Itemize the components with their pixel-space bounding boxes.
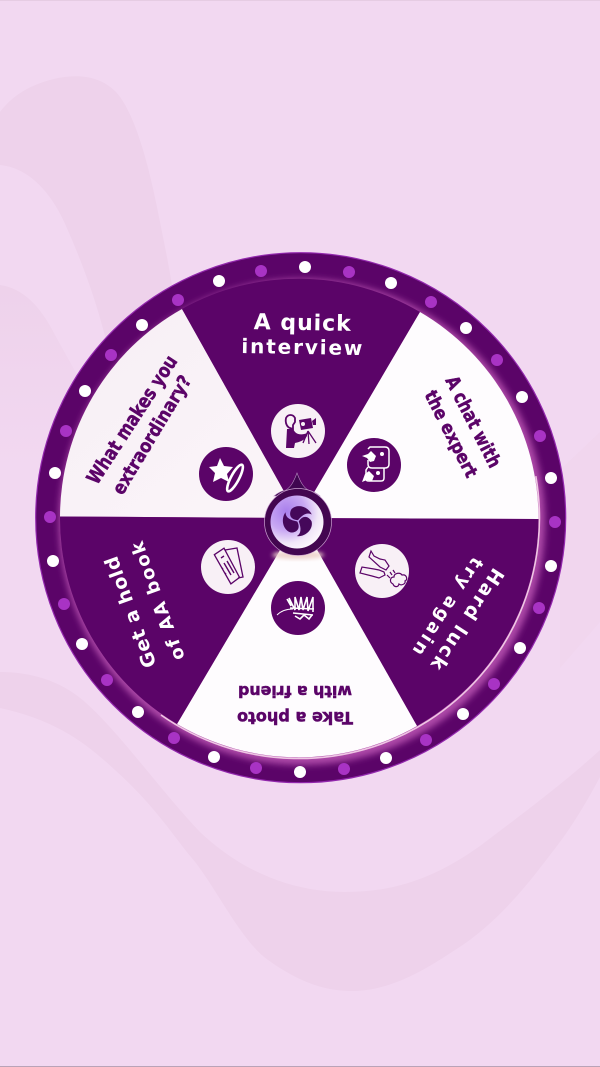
rim lights — [44, 261, 561, 778]
sector: hard luck try again — [299, 518, 538, 726]
label: Get a hold of AA book — [101, 538, 190, 671]
label: A quick interview — [241, 310, 363, 360]
label: A chat with the expert: the expert — [420, 387, 482, 482]
label: Hard luck try again: try again — [408, 553, 487, 659]
label: A quick interview: A quick — [254, 310, 352, 337]
spinner hub — [264, 473, 332, 556]
icon: hands and cloud — [355, 544, 409, 598]
icon: tickets — [201, 540, 255, 594]
icon: camera operator — [271, 404, 325, 458]
prize wheel — [36, 253, 566, 783]
label: Take a photo with a friend — [237, 682, 353, 727]
icon: chat bubbles — [347, 438, 401, 492]
pale rim highlight — [161, 476, 539, 759]
hub light disc — [270, 496, 324, 548]
sector: what makes you extraordinary — [60, 309, 299, 518]
hub dark ring — [264, 488, 332, 556]
hub shadow — [272, 551, 324, 559]
sector: get a hold of AA book — [60, 516, 299, 724]
label: A chat with the expert — [420, 372, 506, 482]
icon: scribbled photo — [271, 581, 325, 635]
label: Take a photo with a friend: with a friend — [238, 682, 352, 701]
sector: a quick interview — [182, 279, 420, 518]
sector: a chat with the expert — [299, 312, 539, 519]
icon: star and ring — [199, 447, 253, 501]
sector: take a photo with a friend — [177, 518, 417, 757]
pointer — [274, 473, 320, 496]
outer ring — [36, 253, 566, 783]
label: Hard luck try again: Hard luck — [426, 564, 508, 674]
label: A chat with the expert: A chat with — [440, 372, 506, 472]
label: Get a hold of AA book: Get a hold — [101, 553, 161, 671]
ring inner glow — [59, 279, 545, 765]
label: What makes you extraordinary?: What makes you — [82, 351, 182, 488]
label: Get a hold of AA book: of AA book — [127, 538, 190, 663]
label: Take a photo with a friend: Take a photo — [237, 707, 353, 727]
label: A quick interview: interview — [241, 334, 363, 360]
label: What makes you extraordinary?: extraordinary? — [109, 372, 196, 499]
logo: triskele — [278, 506, 315, 540]
